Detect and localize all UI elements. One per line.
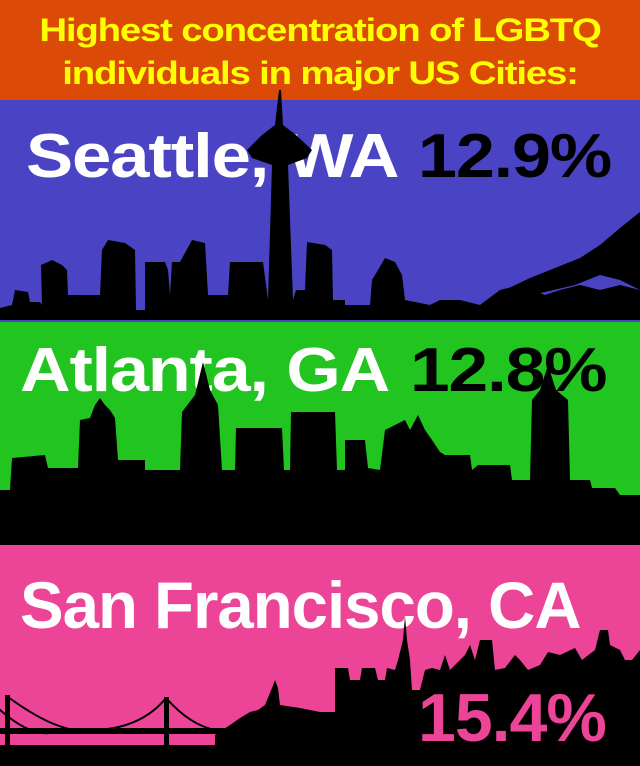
atlanta skyline <box>0 362 640 545</box>
title: individuals in major US Cities: <box>62 55 578 91</box>
atlanta label: Atlanta, GA <box>20 336 389 405</box>
san francisco skyline with bridge <box>0 616 640 766</box>
san francisco value: 15.4% <box>418 680 606 756</box>
atlanta value: 12.8% <box>410 336 606 405</box>
seattle value: 12.9% <box>418 122 611 191</box>
panel: Atlanta background <box>0 322 640 542</box>
panel: Seattle background <box>0 100 640 322</box>
seattle skyline <box>0 90 640 320</box>
san francisco label: San Francisco, CA <box>20 568 581 642</box>
title: Highest concentration of LGBTQ <box>39 12 601 48</box>
title <box>39 12 601 91</box>
seattle label: Seattle, WA <box>26 122 398 191</box>
black divider <box>0 540 640 545</box>
panel: San Francisco background <box>0 542 640 766</box>
header band <box>0 0 640 100</box>
